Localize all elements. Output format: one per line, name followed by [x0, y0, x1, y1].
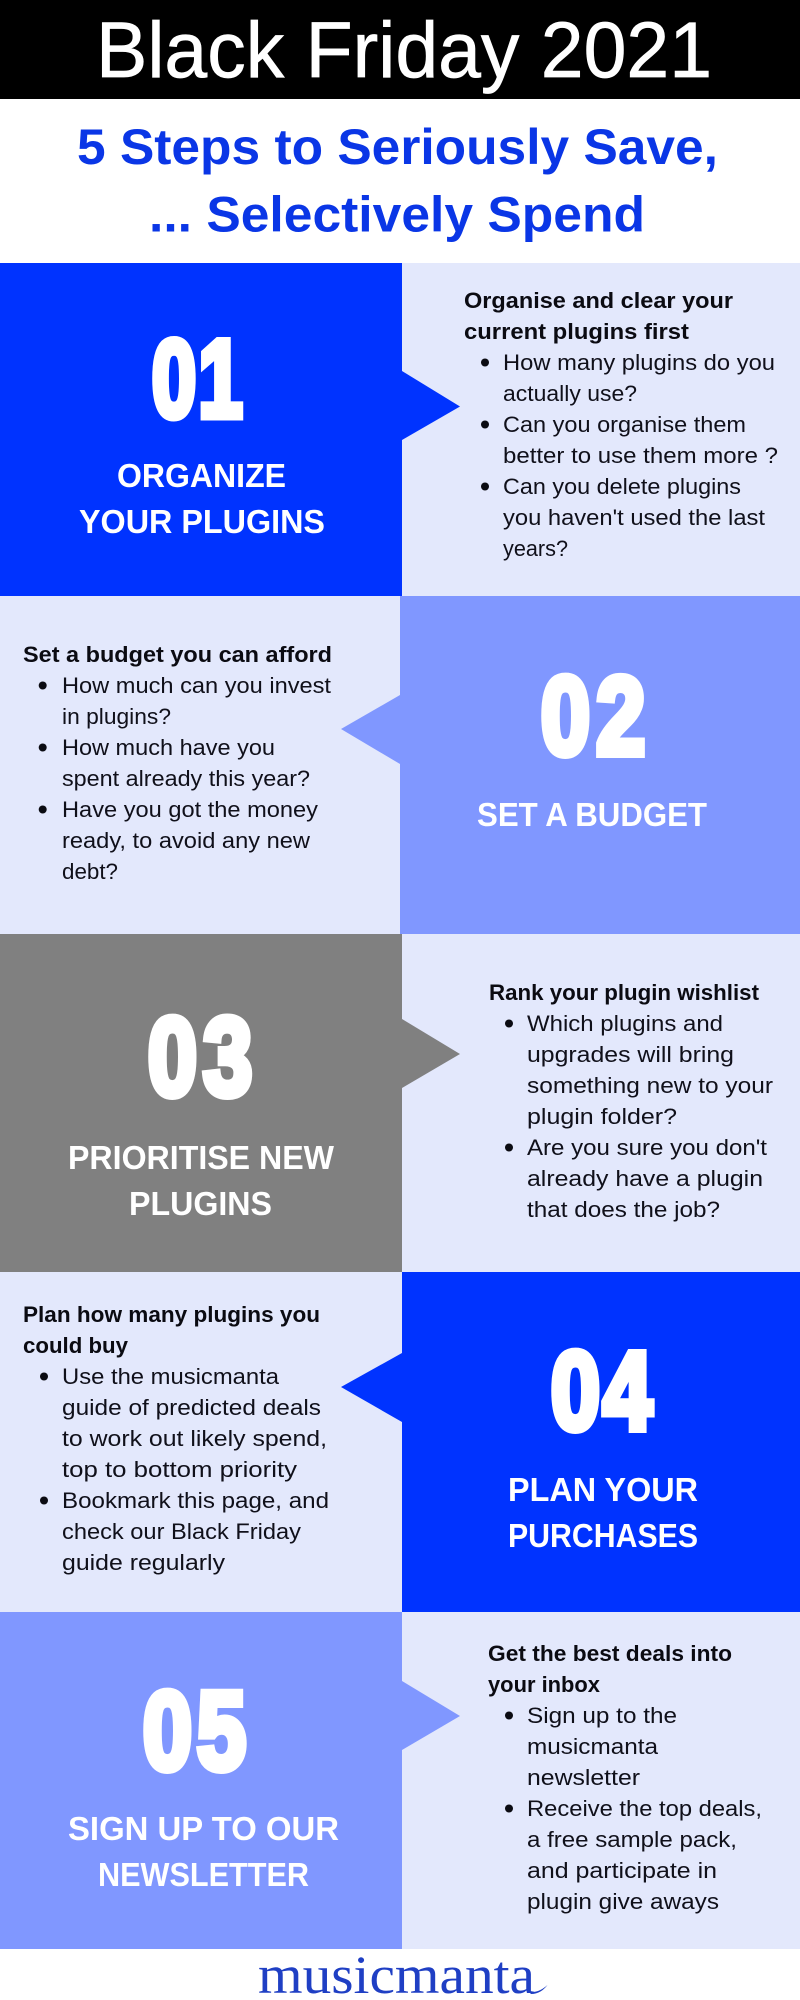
step 1 text block: years? — [503, 536, 568, 561]
panel: step 2 set a budget — [0, 596, 800, 934]
step 3 heading — [68, 1139, 335, 1222]
step 3 text block: upgrades will bring — [527, 1042, 734, 1067]
step 5 text block: musicmanta — [527, 1734, 659, 1759]
step 1 text block — [464, 288, 778, 561]
arrow: step 3 — [402, 1019, 460, 1088]
step 1 text block: Can you organise them — [503, 412, 746, 437]
step 3 text block: already have a plugin — [527, 1166, 763, 1191]
step 2 text block: in plugins? — [62, 704, 171, 729]
arrow: step 4 — [341, 1353, 402, 1422]
number 01: 0 — [152, 318, 196, 441]
step 3 text block: Rank your plugin wishlist — [489, 980, 759, 1005]
arrow: step 2 — [341, 695, 400, 764]
number 05: 5 — [197, 1671, 246, 1793]
step 5 text block: and participate in — [527, 1858, 717, 1883]
step 4 text block — [23, 1302, 329, 1575]
step 4 text block: check our Black Friday — [62, 1519, 302, 1544]
step 3 text block: that does the job? — [527, 1197, 720, 1222]
step 4 heading — [508, 1471, 698, 1554]
step 4 text block: could buy — [23, 1333, 128, 1358]
step 1 text block: How many plugins do you — [503, 350, 775, 375]
subtitle: ... Selectively Spend — [149, 186, 645, 242]
step 3 text block: Are you sure you don't — [527, 1135, 768, 1160]
step 2 text block: ready, to avoid any new — [62, 828, 311, 853]
subtitle: 5 Steps to Seriously Save, — [77, 119, 718, 175]
step 4 text block: to work out likely spend, — [62, 1426, 327, 1451]
panel: step 1 organize your plugins — [0, 263, 800, 596]
step 5 heading — [68, 1810, 339, 1893]
step 4 text block: top to bottom priority — [62, 1457, 298, 1482]
number 02: 0 — [541, 656, 590, 778]
panel: step 3 prioritise new plugins — [0, 934, 800, 1272]
step 5 text block: Receive the top deals, — [527, 1796, 762, 1821]
step 5 text block: your inbox — [488, 1672, 600, 1697]
panel: step 5 sign up to our newsletter — [0, 1612, 800, 1949]
number 04: 0 — [551, 1331, 600, 1453]
step 2 text block: debt? — [62, 859, 118, 884]
step 1 text block: current plugins first — [464, 319, 690, 344]
step 3 text block: Which plugins and — [527, 1011, 723, 1036]
step 5 text block: Get the best deals into — [488, 1641, 732, 1666]
step 1 text block: better to use them more ? — [503, 443, 778, 468]
number 02: 2 — [596, 656, 645, 778]
step 5 text block: newsletter — [527, 1765, 641, 1790]
step 1 text block: you haven't used the last — [503, 505, 766, 530]
step 4 heading: PLAN YOUR — [508, 1471, 698, 1508]
step 2 text block: Set a budget you can afford — [23, 642, 332, 667]
step 5 text block: plugin give aways — [527, 1889, 719, 1914]
step 1 heading: ORGANIZE — [117, 457, 286, 494]
step 4 heading: PURCHASES — [508, 1517, 698, 1554]
step 5 text block — [488, 1641, 762, 1914]
step 2 heading: SET A BUDGET — [477, 796, 707, 833]
step 3 text block — [489, 980, 774, 1222]
step 3 text block: something new to your — [527, 1073, 774, 1098]
step 5 heading: SIGN UP TO OUR — [68, 1810, 339, 1847]
step 5 text block: a free sample pack, — [527, 1827, 737, 1852]
step 2 text block: How much have you — [62, 735, 275, 760]
panel: step 4 plan your purchases — [0, 1272, 800, 1612]
arrow: step 1 — [402, 371, 460, 440]
step 5 text block: Sign up to the — [527, 1703, 677, 1728]
step 2 text block: How much can you invest — [62, 673, 332, 698]
step 1 heading: YOUR PLUGINS — [79, 503, 325, 540]
arrow: step 5 — [402, 1681, 460, 1750]
step 1 heading — [79, 457, 325, 540]
number 01: 1 — [199, 318, 243, 441]
number 03: 0 — [148, 997, 197, 1119]
step 4 text block: guide regularly — [62, 1550, 226, 1575]
step 4 text block: guide of predicted deals — [62, 1395, 321, 1420]
step 3 heading: PRIORITISE NEW — [68, 1139, 335, 1176]
step 1 text block: Can you delete plugins — [503, 474, 741, 499]
step 3 heading: PLUGINS — [129, 1185, 272, 1222]
step 4 text block: Bookmark this page, and — [62, 1488, 329, 1513]
step 2 text block: spent already this year? — [62, 766, 310, 791]
step 1 text block: Organise and clear your — [464, 288, 733, 313]
title banner: Black Friday 2021 — [96, 5, 712, 94]
step 1 text block: actually use? — [503, 381, 637, 406]
step 4 text block: Plan how many plugins you — [23, 1302, 320, 1327]
step 2 text block — [23, 642, 332, 884]
number 03: 3 — [203, 997, 252, 1119]
subtitle — [77, 119, 718, 242]
step 5 heading: NEWSLETTER — [98, 1856, 309, 1893]
number 05: 0 — [143, 1671, 192, 1793]
step 4 text block: Use the musicmanta — [62, 1364, 280, 1389]
step 3 text block: plugin folder? — [527, 1104, 677, 1129]
step 2 text block: Have you got the money — [62, 797, 319, 822]
number 04: 4 — [603, 1331, 652, 1453]
